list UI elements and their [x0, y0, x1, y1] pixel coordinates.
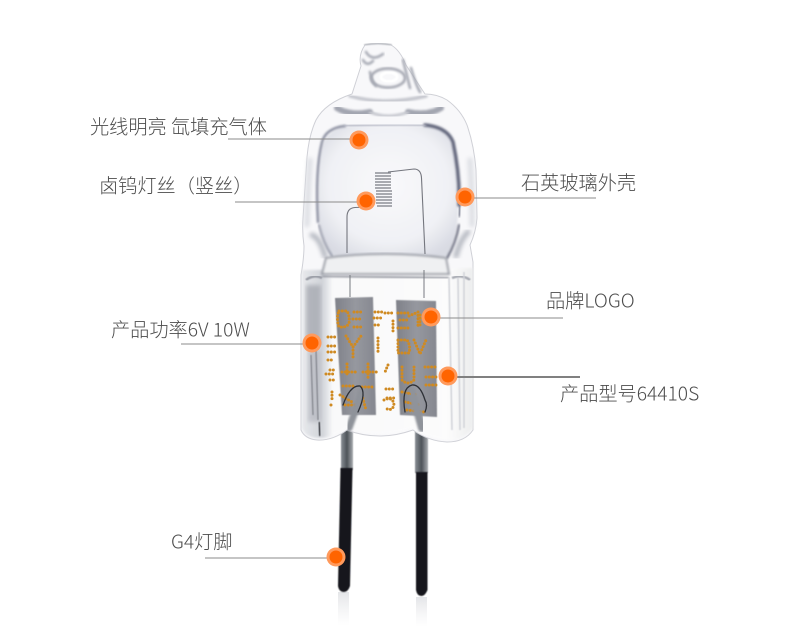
callout: bright light and xenon gas	[90, 112, 368, 150]
bulb illustration	[301, 44, 477, 627]
bulb glass envelope	[301, 44, 477, 442]
filament coil and support wires	[347, 169, 425, 298]
pinch seal block	[302, 254, 473, 440]
inner glass shading	[307, 125, 472, 258]
callout: brand logo	[422, 286, 635, 326]
callout: halogen tungsten filament	[99, 170, 376, 210]
molybdenum foil plates	[335, 297, 437, 417]
callout: model number 64410S: 产品型号64410S	[560, 378, 699, 406]
callout: halogen tungsten filament: 卤钨灯丝（竖丝）	[99, 170, 252, 198]
callout: quartz glass shell: 石英玻璃外壳	[521, 168, 636, 196]
callout: bright light and xenon gas: 光线明亮 氙填充气体	[90, 112, 267, 140]
callout: power 6V 10W	[111, 314, 322, 352]
lead wires at base of foils	[343, 385, 426, 428]
callout: G4 pin	[171, 526, 346, 566]
callout: power 6V 10W: 产品功率6V 10W	[111, 314, 250, 342]
icon: metal pins	[338, 425, 428, 596]
callout: G4 pin: G4灯脚	[171, 526, 233, 554]
icon: pin reflections	[338, 592, 427, 627]
printed brand and model marks	[326, 311, 437, 412]
callout: brand logo: 品牌LOGO	[546, 286, 635, 314]
callout: quartz glass shell	[456, 168, 636, 206]
glass seal tip	[337, 44, 441, 116]
callout: model number 64410S	[438, 366, 699, 406]
